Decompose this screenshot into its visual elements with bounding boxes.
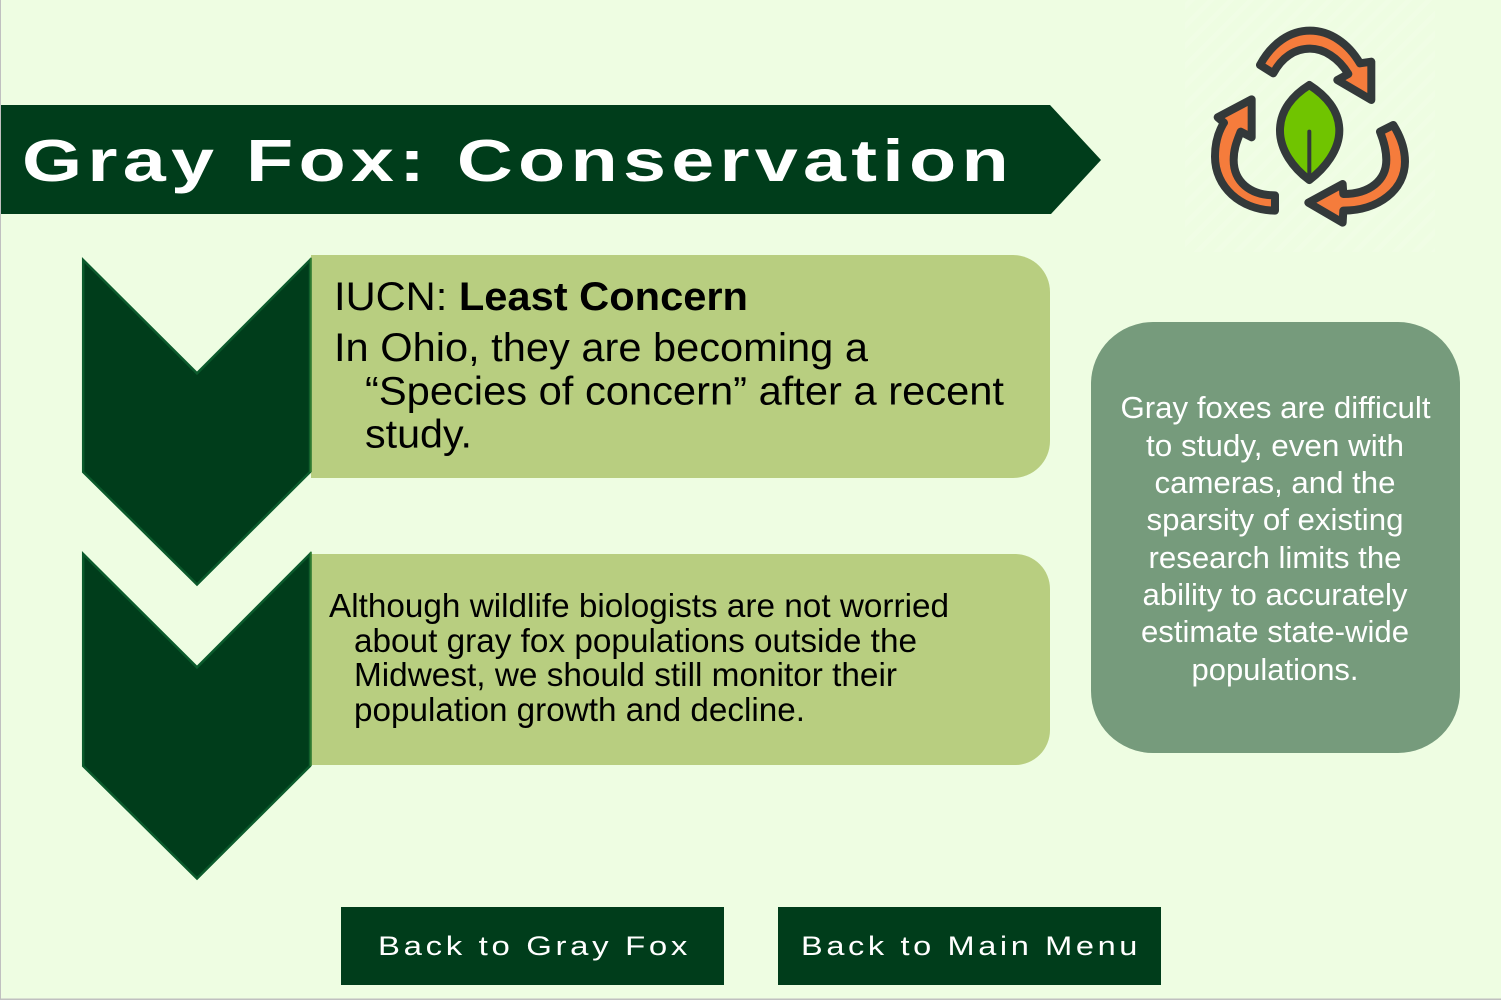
text: Ohio status: study. xyxy=(365,412,472,456)
title banner xyxy=(1,105,1101,214)
text: Ohio status: “Species of concern” after a recent xyxy=(365,370,1004,414)
panel: IUCN status xyxy=(311,255,1050,478)
button: back to gray fox xyxy=(341,907,724,985)
text: research callout: sparsity of existing xyxy=(1146,502,1404,537)
text: monitoring note: Midwest, we should still monitor their xyxy=(354,656,897,693)
text: monitoring note: about gray fox populations outside the xyxy=(354,622,917,659)
text: Ohio status: In Ohio, they are becoming a xyxy=(334,326,869,370)
text: research callout: Gray foxes are difficult xyxy=(1120,390,1431,425)
text: monitoring note: population growth and decline. xyxy=(354,691,805,728)
text: research callout: ability to accurately xyxy=(1142,577,1408,612)
chevron: second xyxy=(83,552,312,878)
button: back to gray fox: Back to Gray Fox xyxy=(378,931,691,961)
button: back to main menu: Back to Main Menu xyxy=(801,931,1141,961)
text: research callout xyxy=(1120,390,1431,687)
text: research callout: cameras, and the xyxy=(1154,465,1396,500)
text: IUCN status heading: IUCN: Least Concern xyxy=(334,275,748,319)
text: research callout: estimate state-wide xyxy=(1141,614,1409,649)
icon: recycling arrows with leaf xyxy=(1215,31,1405,223)
text: monitoring note xyxy=(329,587,949,728)
panel: research callout xyxy=(1091,322,1460,753)
button: back to main menu xyxy=(778,907,1161,985)
text: monitoring note: Although wildlife biologists are not worried xyxy=(329,587,949,624)
text: research callout: research limits the xyxy=(1148,540,1402,575)
panel: monitoring note xyxy=(311,554,1050,765)
title: Gray Fox: Conservation xyxy=(22,128,1014,194)
text: Ohio status xyxy=(334,326,1004,456)
text: research callout: to study, even with xyxy=(1146,428,1404,463)
chevron: first xyxy=(83,258,312,584)
text: research callout: populations. xyxy=(1192,652,1358,687)
